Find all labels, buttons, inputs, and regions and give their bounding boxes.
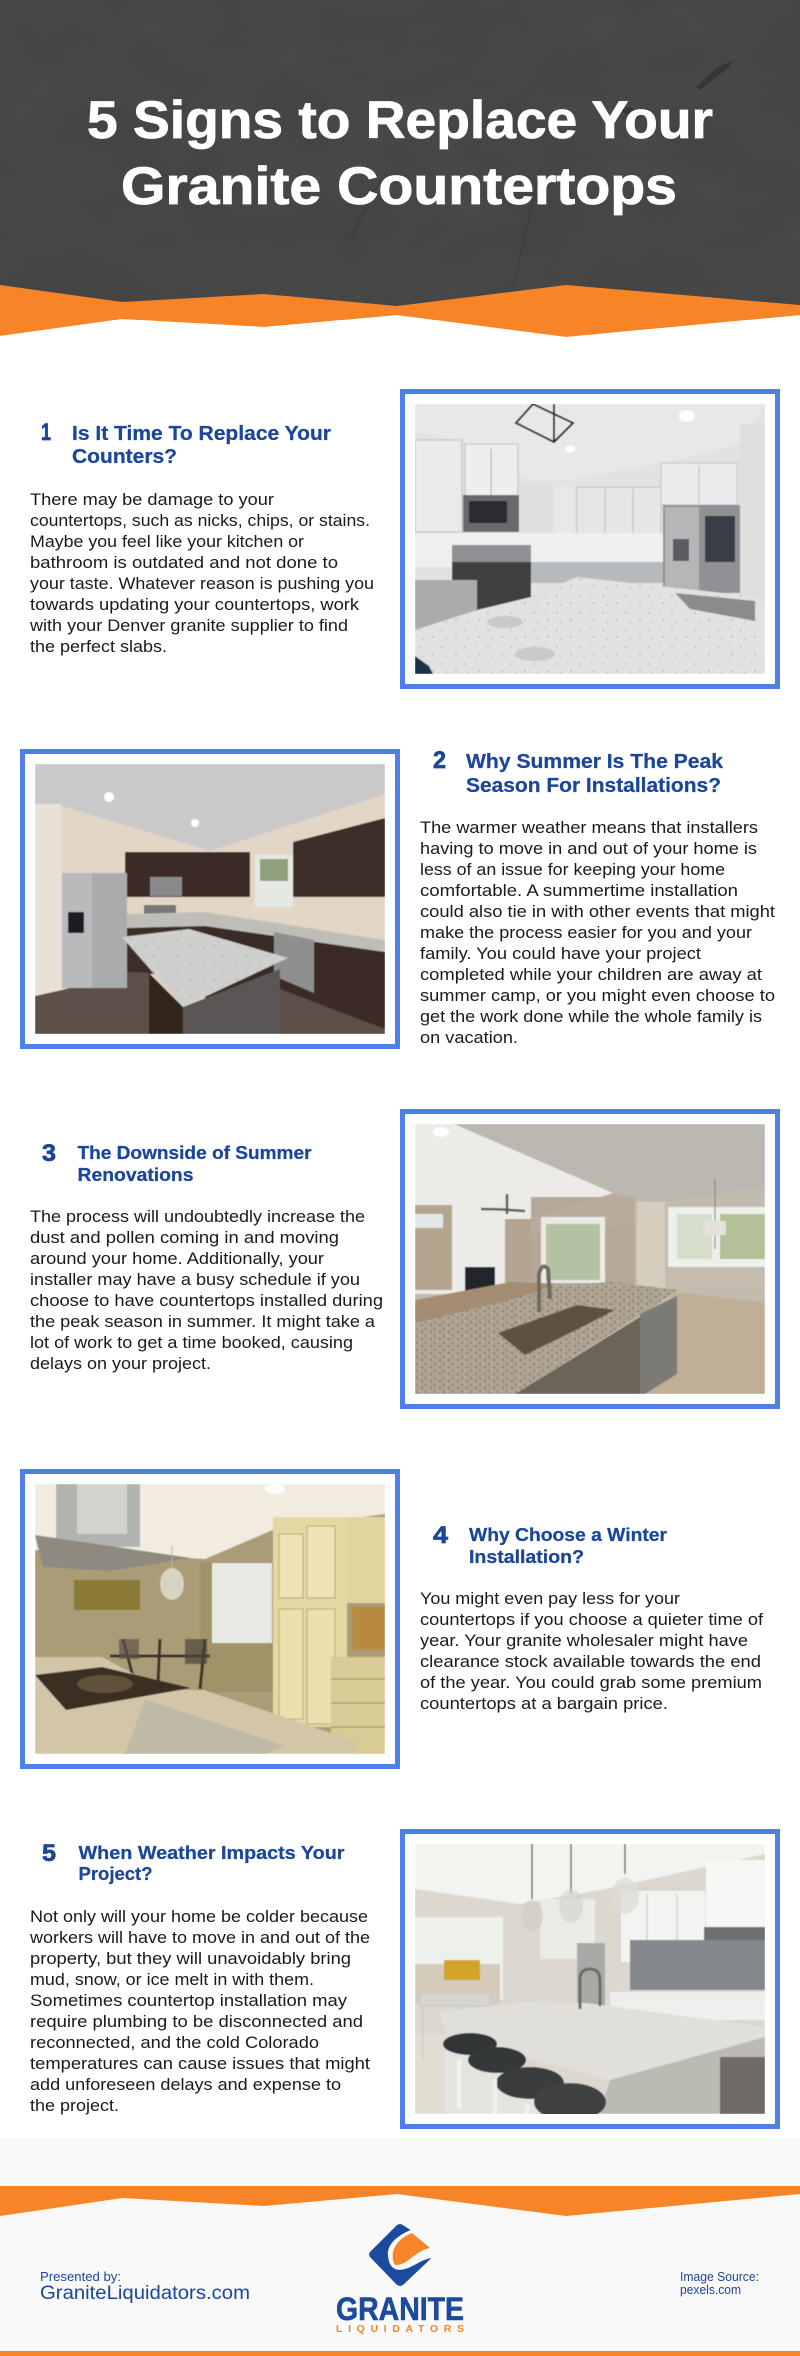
body text 2: less of an issue for keeping your home [420,861,725,879]
footer [0,2138,800,2356]
heading 1: Counters? [72,446,177,468]
body text 2: completed while your children are away at [420,966,763,984]
image source credit: Image Source: [680,2269,759,2284]
heading 4: Installation? [469,1546,584,1567]
section 4 [22,1472,764,1766]
body text 3 [30,1208,383,1373]
photo: white kitchen with granite island [415,404,765,674]
body text 5: Not only will your home be colder because [30,1908,368,1926]
logo: Granite Liquidators [336,2224,464,2335]
body text 3: dust and pollen coming in and moving [30,1229,339,1247]
body text 4: year. Your granite wholesaler might have [420,1632,748,1650]
body text 3: lot of work to get a time booked, causing [30,1334,353,1352]
body text 4: countertops at a bargain price. [420,1695,668,1713]
number 2: 2 [433,747,446,774]
section 3 [30,1112,778,1406]
heading 5: Project? [78,1863,152,1884]
heading 2: Why Summer Is The Peak [466,751,724,773]
body text 4 [420,1590,764,1713]
title [87,91,713,216]
photo: dark wood kitchen [35,764,385,1034]
logo wordmark: GRANITE [336,2291,464,2327]
photo frame 3 [402,1112,778,1406]
bottom orange bar [0,2351,800,2356]
body text 3: the peak season in summer. It might take a [30,1313,376,1331]
heading 1 [72,423,331,468]
body text 5: Sometimes countertop installation may [30,1992,348,2010]
body text 5: temperatures can cause issues that might [30,2055,371,2073]
body text 5: mud, snow, or ice melt in with them. [30,1971,314,1989]
body text 1: Maybe you feel like your kitchen or [30,533,305,551]
heading 3 [78,1142,312,1185]
body text 3: around your home. Additionally, your [30,1250,325,1268]
body text 2: could also tie in with other events that might [420,903,776,921]
body text 2: make the process easier for you and your [420,924,753,942]
body text 5 [29,1908,371,2115]
heading 2 [466,751,724,797]
photo frame 5 [402,1832,778,2126]
body text 3: delays on your project. [30,1355,211,1373]
number 5: 5 [42,1840,56,1867]
body text 1: towards updating your countertops, work [30,596,360,614]
body text 2: having to move in and out of your home is [420,840,757,858]
body text 5: reconnected, and the cold Colorado [30,2034,319,2052]
body text 2: on vacation. [420,1029,518,1047]
heading 4 [469,1524,667,1567]
body text 2: get the work done while the whole family is [420,1008,762,1026]
footer orange torn band [0,2186,800,2216]
body text 5: workers will have to move in and out of the [29,1929,370,1947]
section 1 [29,392,778,686]
number 3: 3 [42,1140,56,1167]
photo: open living room with granite sink [415,1124,765,1394]
logo mark [369,2224,432,2286]
body text 1: the perfect slabs. [30,638,167,656]
white area under band [0,315,800,345]
photo: cream kitchen with cooktop [35,1484,385,1754]
presented by credit [40,2269,250,2304]
heading 5 [78,1842,344,1884]
number 4: 4 [433,1522,449,1549]
body text 1: bathroom is outdated and not done to [30,554,338,572]
body text 2: comfortable. A summertime installation [420,882,738,900]
photo frame 1 [402,392,778,686]
body text 5: the project. [30,2097,119,2115]
orange torn band [0,285,800,337]
body text 1 [29,491,374,656]
image source credit [680,2269,759,2297]
section 2 [22,747,776,1047]
image source credit: pexels.com [680,2282,741,2297]
granite texture background [0,0,800,320]
logo tagline: LIQUIDATORS [336,2323,464,2335]
body text 1: your taste. Whatever reason is pushing you [30,575,374,593]
body text 2: The warmer weather means that installers [420,819,758,837]
header banner [0,0,800,345]
body text 3: The process will undoubtedly increase the [30,1208,365,1226]
presented by credit: GraniteLiquidators.com [40,2282,250,2304]
body text 5: property, but they will unavoidably bring [30,1950,351,1968]
body text 4: You might even pay less for your [420,1590,681,1608]
presented by credit: Presented by: [40,2269,121,2284]
photo: white kitchen with island and stools [415,1844,765,2121]
body text 1: countertops, such as nicks, chips, or stains. [30,512,370,530]
body text 2: family. You could have your project [420,945,702,963]
heading 1: Is It Time To Replace Your [72,423,331,445]
body text 4: of the year. You could grab some premium [420,1674,762,1692]
heading 3: The Downside of Summer [78,1142,312,1163]
body text 5: add unforeseen delays and expense to [30,2076,341,2094]
heading 2: Season For Installations? [466,775,721,797]
body text 2 [420,819,776,1047]
body text 1: There may be damage to your [30,491,275,509]
heading 3: Renovations [78,1164,194,1185]
title: Granite Countertops [121,157,677,216]
title: 5 Signs to Replace Your [87,91,713,150]
photo frame 2 [22,752,398,1046]
photo frame 4 [22,1472,398,1766]
footer background [0,2138,800,2356]
body text 5: require plumbing to be disconnected and [30,2013,363,2031]
body text 3: installer may have a busy schedule if you [30,1271,360,1289]
section 5 [29,1832,778,2126]
heading 4: Why Choose a Winter [469,1524,667,1545]
body text 2: summer camp, or you might even choose to [420,987,775,1005]
body text 1: with your Denver granite supplier to find [29,617,348,635]
body text 4: clearance stock available towards the end [420,1653,761,1671]
body text 4: countertops if you choose a quieter time of [420,1611,764,1629]
heading 5: When Weather Impacts Your [78,1842,344,1863]
number 1: 1 [41,419,51,446]
body text 3: choose to have countertops installed during [30,1292,383,1310]
